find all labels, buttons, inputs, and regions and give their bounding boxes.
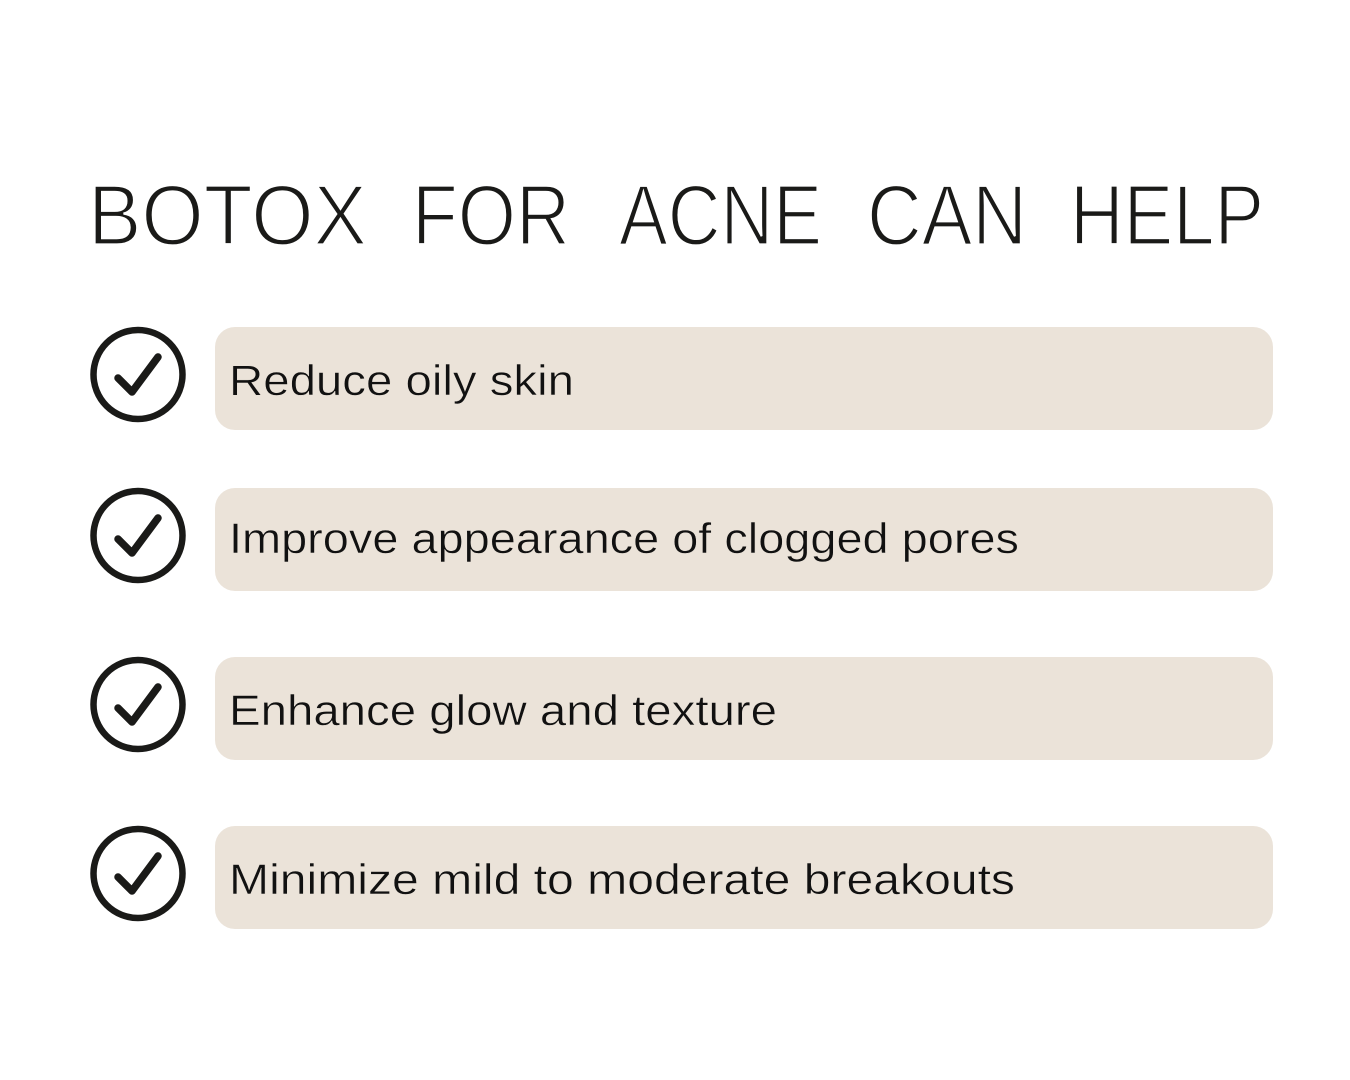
item 2: improve appearance of clogged pores (94, 488, 1273, 591)
title: ACNE (619, 168, 822, 264)
text: improve appearance of clogged pores: Improve appearance of clogged pores (229, 515, 1019, 563)
icon: check mark in circle (94, 330, 182, 419)
item 4: minimize mild to moderate breakouts (94, 826, 1273, 929)
text: minimize mild to moderate breakouts: Minimize mild to moderate breakouts (229, 856, 1015, 904)
title: CAN (867, 168, 1027, 264)
icon: check mark in circle (94, 829, 182, 918)
panel: reduce oily skin (215, 327, 1273, 430)
icon: check mark in circle (94, 660, 182, 749)
title: FOR (412, 168, 570, 264)
title (88, 168, 1264, 264)
text: reduce oily skin: Reduce oily skin (229, 357, 574, 405)
title: BOTOX (88, 168, 367, 264)
icon: check mark in circle (94, 491, 182, 580)
panel: improve appearance of clogged pores (215, 488, 1273, 591)
panel: minimize mild to moderate breakouts (215, 826, 1273, 929)
text: enhance glow and texture: Enhance glow and texture (229, 687, 777, 735)
title: HELP (1070, 168, 1264, 264)
panel: enhance glow and texture (215, 657, 1273, 760)
item 3: enhance glow and texture (94, 657, 1273, 760)
item 1: reduce oily skin (94, 327, 1273, 430)
